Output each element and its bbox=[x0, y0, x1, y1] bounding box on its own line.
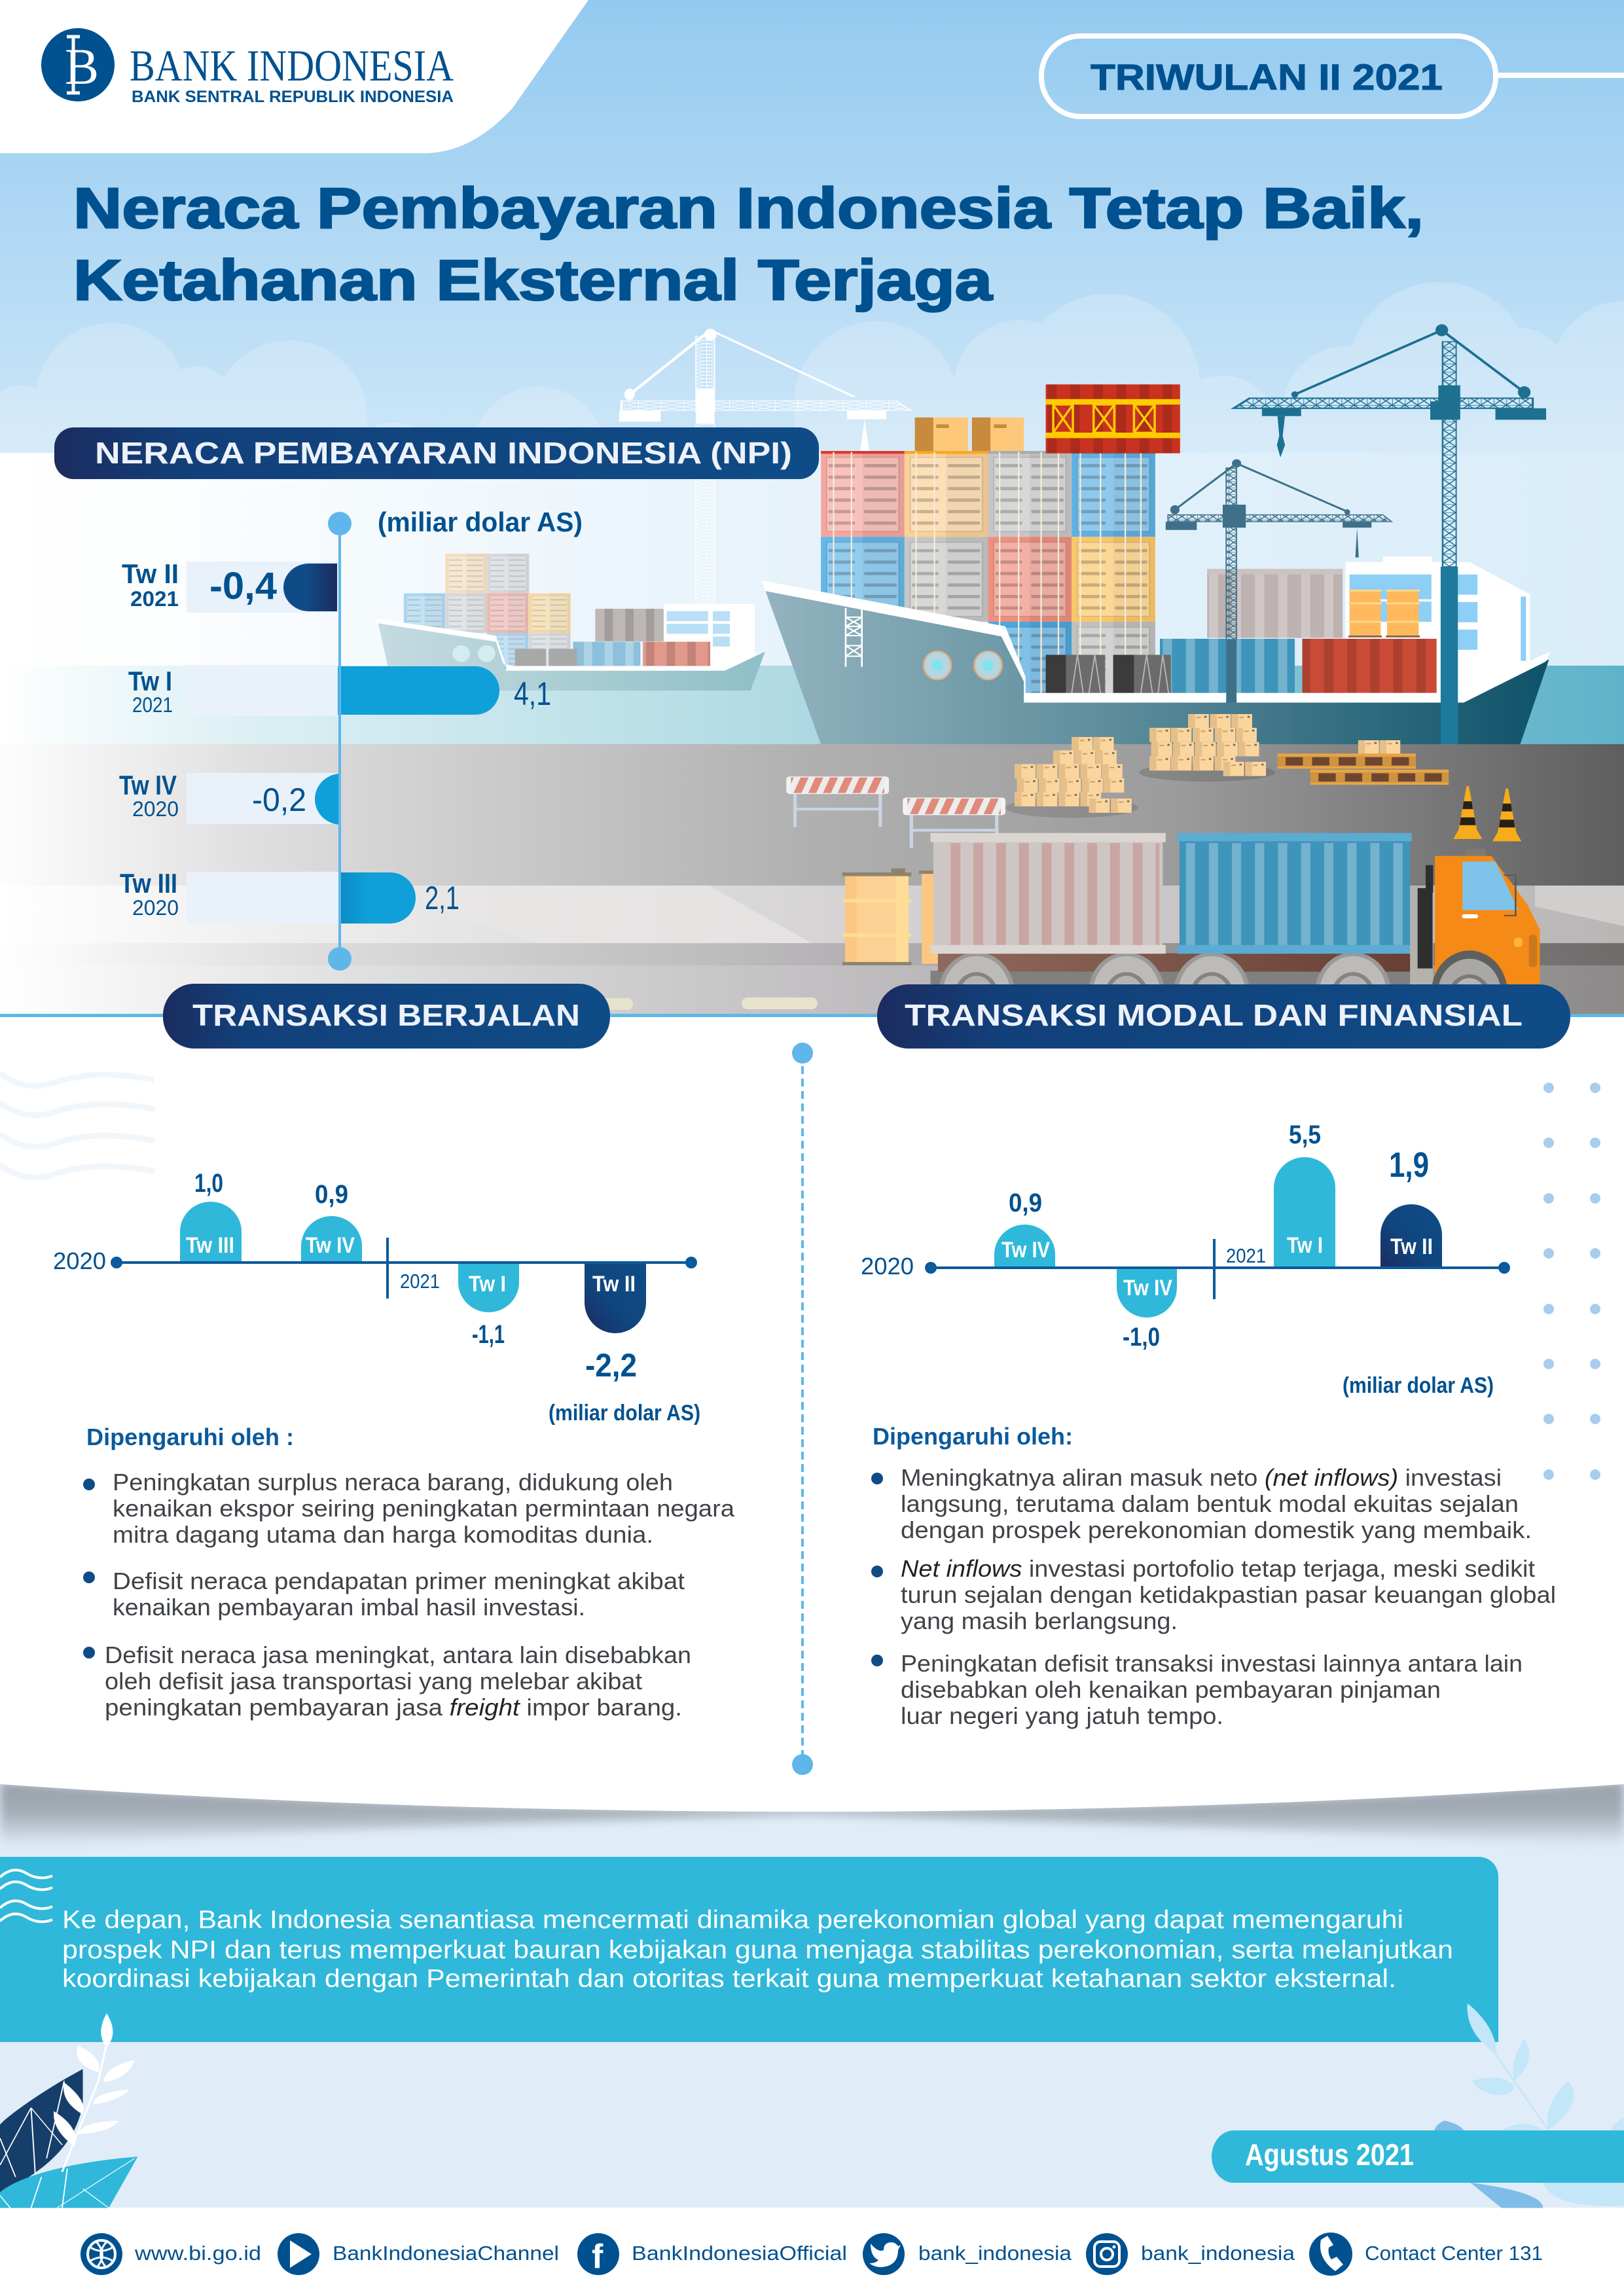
icon: contact center bbox=[1309, 2233, 1352, 2276]
icon: Facebook: f bbox=[592, 2238, 604, 2276]
truck container gray bbox=[930, 833, 1166, 954]
gray rear container bbox=[1207, 569, 1343, 638]
heading: Neraca Pembayaran Indonesia bbox=[54, 427, 819, 479]
bullet 1 bbox=[871, 1464, 1532, 1543]
footer: contact links: BankIndonesiaChannel bbox=[333, 2242, 559, 2265]
bullet 3: Defisit neraca jasa meningkat, antara lain disebabkan bbox=[105, 1641, 691, 1668]
deck containers bbox=[1046, 639, 1437, 693]
subheading: Dipengaruhi oleh : bbox=[86, 1424, 294, 1450]
bar labels: Tw IV bbox=[306, 1233, 355, 1258]
unit label: (miliar dolar AS) bbox=[378, 507, 583, 537]
values: 1,9 bbox=[1389, 1145, 1429, 1185]
logo: Bank Indonesia: BANK INDONESIA bbox=[130, 41, 454, 90]
row: Tw IV 2020: -0,2 bbox=[252, 781, 306, 818]
unit label: (miliar dolar AS) bbox=[549, 1401, 700, 1426]
white waves bbox=[0, 1870, 52, 1922]
bar labels: Tw IV bbox=[1001, 1238, 1050, 1263]
bullet 3: oleh defisit jasa transportasi yang melebar akibat bbox=[105, 1668, 642, 1695]
year labels: 2020 bbox=[53, 1247, 106, 1274]
lower sky band fading to white bbox=[0, 453, 1624, 669]
boxes on containers bbox=[915, 418, 1024, 451]
decorative light waves bbox=[0, 1073, 154, 1177]
big crane bbox=[1233, 324, 1546, 744]
left foliage bbox=[0, 2013, 137, 2208]
drums on deck bbox=[1348, 590, 1420, 636]
period badge: Triwulan II 2021: TRIWULAN II 2021 bbox=[1091, 56, 1443, 98]
values: -2,2 bbox=[585, 1347, 637, 1384]
row: Tw IV 2020: Tw IV bbox=[119, 770, 177, 800]
row: Tw IV 2020 bbox=[119, 770, 306, 821]
row: Tw I 2021: Tw I bbox=[128, 666, 172, 696]
bullet 3 bbox=[871, 1650, 1523, 1729]
chart: Transaksi Berjalan bbox=[53, 1169, 700, 1426]
text block: Transaksi Modal dan Finansial factors bbox=[871, 1423, 1556, 1729]
bars bbox=[994, 1157, 1442, 1318]
bullet 3: disebabkan oleh kenaikan pembayaran pinjaman bbox=[901, 1676, 1441, 1703]
callout: outlook statement bbox=[0, 1857, 1498, 2042]
row: Tw I 2021: 4,1 bbox=[514, 675, 551, 712]
values: -1,0 bbox=[1123, 1323, 1160, 1352]
ship hull bbox=[761, 581, 1550, 744]
date badge bbox=[1212, 2130, 1624, 2183]
bullet 3: Peningkatan defisit transaksi investasi lainnya antara lain bbox=[901, 1650, 1523, 1677]
bullet 2: kenaikan pembayaran imbal hasil investasi. bbox=[113, 1594, 585, 1621]
footer: contact links: www.bi.go.id bbox=[134, 2242, 261, 2265]
footer: contact links: BankIndonesiaOfficial bbox=[632, 2242, 847, 2265]
callout: outlook statement: Ke depan, Bank Indonesia senantiasa mencermati dinamika perekonomian global yang dapat memengaruhi bbox=[62, 1906, 1403, 1934]
bar labels: Tw II bbox=[1390, 1234, 1433, 1259]
sea bbox=[0, 666, 1624, 745]
axis bbox=[111, 1238, 697, 1299]
bar labels bbox=[1001, 1233, 1433, 1300]
values: 5,5 bbox=[1289, 1121, 1321, 1149]
text block: Transaksi Berjalan factors bbox=[83, 1424, 735, 1721]
year labels bbox=[861, 1244, 1266, 1280]
heading: Neraca Pembayaran Indonesia: NERACA PEMBAYARAN INDONESIA (NPI) bbox=[95, 436, 792, 470]
logo: Bank Indonesia bbox=[41, 28, 454, 106]
year labels: 2021 bbox=[400, 1270, 440, 1293]
drums on quay bbox=[842, 869, 939, 965]
barriers bbox=[786, 776, 1005, 848]
row: Tw II 2021 bbox=[122, 558, 277, 611]
sky background with clouds bbox=[0, 0, 1624, 619]
title: Neraca Pembayaran Indonesia Tetap Baik, bbox=[73, 177, 1424, 240]
bar labels: Tw II bbox=[592, 1272, 636, 1297]
callout: outlook statement: koordinasi kebijakan dengan Pemerintah dan otoritas terkait guna memperkuat ketahanan sektor eksternal. bbox=[62, 1965, 1396, 1993]
subheading: Dipengaruhi oleh: bbox=[873, 1423, 1073, 1450]
stacked boxes bbox=[1005, 714, 1400, 818]
bar labels bbox=[186, 1233, 636, 1297]
background crane in white bbox=[619, 329, 911, 657]
bar labels: Tw I bbox=[1287, 1233, 1323, 1258]
heading: Transaksi Berjalan: TRANSAKSI BERJALAN bbox=[192, 998, 580, 1032]
year labels bbox=[53, 1247, 440, 1293]
footer: contact links bbox=[81, 2233, 1543, 2276]
bars bbox=[283, 564, 499, 924]
red top container bbox=[1046, 384, 1180, 454]
pallets bbox=[1278, 753, 1449, 785]
white content sheet bbox=[0, 1014, 1624, 2296]
bullet 3: peningkatan pembayaran jasa freight impor barang. bbox=[105, 1694, 682, 1721]
truck cab bbox=[1410, 849, 1540, 1035]
bar labels: Tw I bbox=[469, 1272, 506, 1297]
bullet 2: turun sejalan dengan ketidakpastian pasar keuangan global bbox=[901, 1581, 1556, 1608]
icon: Twitter bbox=[863, 2233, 905, 2275]
values: 1,0 bbox=[194, 1169, 223, 1198]
row: Tw II 2021: 2021 bbox=[130, 587, 179, 611]
footer: contact links: bank_indonesia bbox=[918, 2242, 1072, 2265]
bullet 2: Defisit neraca pendapatan primer meningkat akibat bbox=[113, 1568, 685, 1594]
main cargo ship with containers bbox=[761, 324, 1550, 744]
values: -1,1 bbox=[472, 1320, 505, 1349]
row: Tw IV 2020: 2020 bbox=[132, 797, 179, 821]
traffic cones bbox=[1453, 786, 1521, 841]
chart: Transaksi Modal dan Finansial bbox=[861, 1121, 1510, 1398]
values bbox=[1009, 1121, 1429, 1352]
top-left logo panel bbox=[0, 0, 588, 153]
year labels: 2021 bbox=[1226, 1244, 1266, 1267]
small background cargo ship bbox=[375, 554, 765, 691]
year labels: 2020 bbox=[861, 1253, 914, 1280]
superstructure bbox=[1346, 556, 1530, 695]
date badge: Agustus 2021 bbox=[1245, 2138, 1414, 2172]
footer: contact links: bank_indonesia bbox=[1141, 2242, 1295, 2265]
row: Tw III 2020: 2,1 bbox=[425, 880, 460, 916]
icon: Instagram bbox=[1086, 2233, 1128, 2275]
unit label: (miliar dolar AS) bbox=[1343, 1373, 1494, 1398]
bullet 3 bbox=[83, 1641, 691, 1721]
heading: Transaksi Modal dan Finansial: TRANSAKSI MODAL DAN FINANSIAL bbox=[905, 998, 1523, 1032]
axis bbox=[328, 512, 352, 971]
bullet 1: Peningkatan surplus neraca barang, didukung oleh bbox=[113, 1469, 673, 1496]
values: 0,9 bbox=[315, 1180, 348, 1209]
decorative dots bbox=[1543, 1083, 1600, 1480]
row: Tw I 2021 bbox=[128, 666, 551, 717]
footer: contact links: Contact Center 131 bbox=[1365, 2242, 1543, 2265]
row: Tw III 2020: 2020 bbox=[132, 896, 179, 920]
row: Tw I 2021: 2021 bbox=[132, 693, 173, 717]
small crane bbox=[1166, 459, 1392, 702]
heading: Transaksi Modal dan Finansial bbox=[877, 984, 1570, 1049]
center dashed divider bbox=[792, 1043, 813, 1775]
row: Tw III 2020: Tw III bbox=[120, 868, 177, 899]
bullet 2 bbox=[83, 1568, 685, 1621]
truck wheels and chassis bbox=[930, 953, 1420, 1031]
quay cargo illustration bbox=[786, 714, 1540, 1035]
bullet 2: yang masih berlangsung. bbox=[901, 1607, 1178, 1634]
title bbox=[73, 177, 1424, 312]
bullet 2 bbox=[871, 1555, 1556, 1634]
row: Tw II 2021: Tw II bbox=[122, 558, 179, 589]
row: Tw II 2021: -0,4 bbox=[209, 565, 277, 607]
bullet 1: langsung, terutama dalam bentuk modal ekuitas sejalan bbox=[901, 1490, 1519, 1517]
values: 0,9 bbox=[1009, 1189, 1042, 1217]
container stack bbox=[821, 451, 1155, 707]
values bbox=[194, 1169, 637, 1384]
bullet 1 bbox=[83, 1469, 735, 1548]
NPI bar chart bbox=[119, 507, 583, 971]
bar labels: Tw IV bbox=[1123, 1276, 1172, 1300]
logo: Bank Indonesia: BANK SENTRAL REPUBLIK INDONESIA bbox=[132, 88, 454, 106]
heading: Transaksi Berjalan bbox=[163, 984, 610, 1049]
bullet 1: mitra dagang utama dan harga komoditas dunia. bbox=[113, 1521, 653, 1548]
icon: Facebook bbox=[577, 2233, 619, 2276]
icon: YouTube channel bbox=[278, 2233, 319, 2275]
title: Ketahanan Eksternal Terjaga bbox=[73, 249, 993, 312]
bullet 1: Meningkatnya aliran masuk neto (net inflows) investasi bbox=[901, 1464, 1502, 1491]
bullet 1: kenaikan ekspor seiring peningkatan permintaan negara bbox=[113, 1495, 735, 1522]
truck container blue bbox=[1177, 833, 1412, 954]
bullet 2: Net inflows investasi portofolio tetap terjaga, meski sedikit bbox=[901, 1555, 1535, 1582]
icon: website bbox=[81, 2233, 122, 2275]
row backgrounds bbox=[187, 562, 340, 924]
right foliage bbox=[1434, 2003, 1624, 2208]
bar labels: Tw III bbox=[186, 1233, 234, 1258]
period badge: Triwulan II 2021 bbox=[1041, 36, 1624, 117]
logo: Bank Indonesia: B bbox=[65, 38, 99, 95]
bullet 3: luar negeri yang jatuh tempo. bbox=[901, 1702, 1223, 1729]
road and quay bbox=[0, 744, 1624, 1016]
bullet 1: dengan prospek perekonomian domestik yang membaik. bbox=[901, 1516, 1532, 1543]
axis bbox=[925, 1239, 1510, 1299]
row: Tw III 2020 bbox=[120, 868, 460, 920]
bars bbox=[180, 1202, 646, 1333]
callout: outlook statement: prospek NPI dan terus memperkuat bauran kebijakan guna menjaga stabilitas perekonomian, serta melanjutkan bbox=[62, 1936, 1453, 1964]
